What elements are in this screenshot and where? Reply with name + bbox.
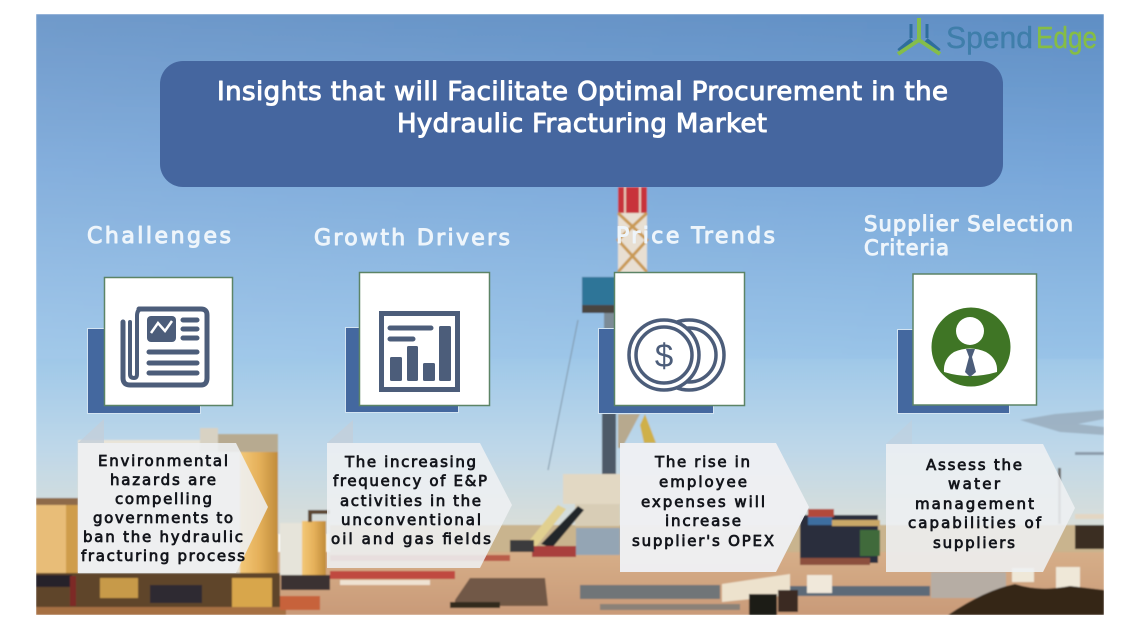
horizon equipment right of centre: [800, 515, 878, 563]
arrow callout: challenges: ban the hydraulic: [83, 528, 243, 546]
arrow callout: price trends: supplier's OPEX: [632, 532, 774, 550]
arrow callout: challenges: Environmental: [98, 452, 228, 470]
heading: growth drivers: Growth Drivers: [314, 226, 510, 251]
logo: SpendEdge: Edge: [1036, 20, 1097, 55]
title banner: [160, 61, 1003, 187]
arrow callout: supplier selection criteria: Assess the: [926, 456, 1022, 474]
arrow callout: price trends: expenses will: [641, 493, 765, 511]
arrow callout: challenges: [78, 419, 268, 573]
pipework foreground left: [36, 573, 280, 609]
left storage tanks: [36, 498, 78, 505]
arrow callout: price trends: increase: [665, 512, 741, 530]
rig floor: [563, 474, 623, 504]
icon card: coins: $: [655, 337, 673, 374]
icon card: business person: [898, 274, 1036, 414]
panel: price trends: [598, 224, 809, 572]
arrow callout: challenges: governments to: [93, 509, 233, 527]
arrow callout: supplier selection criteria: management: [915, 495, 1034, 513]
logo: SpendEdge: Spend: [946, 20, 1033, 55]
heading: price trends: Price Trends: [616, 224, 775, 249]
white containers: [722, 574, 790, 602]
arrow callout: challenges: fracturing process: [81, 547, 245, 565]
rig derrick: [618, 187, 647, 213]
logo: SpendEdge: [898, 18, 1097, 55]
title text: Hydraulic Fracturing Market: [397, 109, 767, 139]
title text: [217, 77, 948, 139]
arrow callout: growth drivers: unconventional: [341, 511, 481, 529]
heading: supplier selection criteria: Criteria: [864, 236, 949, 260]
panel: challenges: [78, 224, 268, 573]
arrow callout: supplier selection criteria: water: [948, 475, 1001, 493]
ground stripes: [580, 585, 720, 599]
arrow callout: supplier selection criteria: [886, 420, 1075, 572]
title text: Insights that will Facilitate Optimal Procurement in the: [217, 77, 948, 107]
arrow callout: growth drivers: frequency of E&P: [333, 472, 487, 490]
arrow callout: growth drivers: The increasing: [344, 453, 476, 471]
arrow callout: challenges: compelling: [115, 490, 212, 508]
heading: supplier selection criteria: Supplier Selection: [864, 212, 1073, 236]
arrow callout: supplier selection criteria: suppliers: [933, 534, 1015, 552]
panel: supplier selection criteria: [864, 212, 1075, 572]
arrow callout: growth drivers: oil and gas fields: [331, 530, 491, 548]
arrow callout: price trends: employee: [659, 473, 747, 491]
icon card: newspaper: [88, 278, 232, 414]
heading: challenges: Challenges: [87, 224, 231, 249]
metal staircases: [455, 578, 548, 606]
dirt mound: [948, 584, 1104, 615]
clouds: [1020, 410, 1104, 435]
arrow callout: price trends: [620, 443, 809, 572]
heading: supplier selection criteria: [864, 212, 1073, 260]
icon card: coins: [598, 272, 744, 414]
arrow callout: supplier selection criteria: capabilities of: [908, 514, 1042, 532]
arrow callout: growth drivers: [327, 420, 512, 568]
arrow callout: growth drivers: activities in the: [340, 492, 481, 510]
arrow callout: challenges: hazards are: [110, 471, 216, 489]
arrow callout: price trends: The rise in: [654, 453, 750, 471]
icon card: bar chart report: [346, 272, 490, 412]
barrels: [749, 594, 777, 615]
panel: growth drivers: [314, 226, 512, 568]
